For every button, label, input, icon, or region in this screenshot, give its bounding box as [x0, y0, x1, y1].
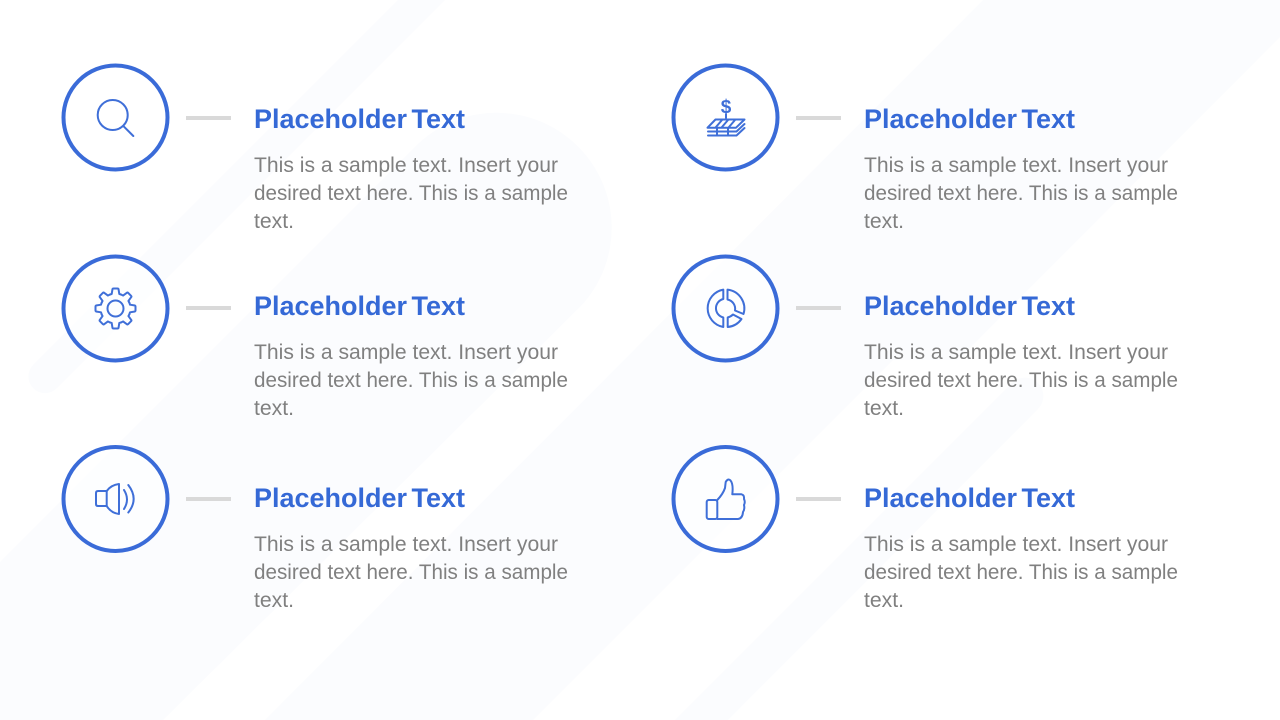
connector line [796, 497, 841, 501]
icon: speaker [96, 484, 134, 514]
body text: text. [864, 397, 904, 420]
icon circle: thumbs up [674, 447, 778, 551]
item: speaker [64, 447, 568, 612]
body text [254, 154, 568, 233]
body text: This is a sample text. Insert your [254, 154, 558, 177]
connector line [796, 306, 841, 310]
body text: text. [864, 589, 904, 612]
item: donut chart [674, 256, 1178, 420]
body text: This is a sample text. Insert your [864, 533, 1168, 556]
body text: text. [254, 397, 294, 420]
connector line [186, 497, 231, 501]
body text: text. [254, 210, 294, 233]
icon circle: search [64, 66, 168, 170]
body text: This is a sample text. Insert your [864, 154, 1168, 177]
body text [254, 533, 568, 612]
body text [864, 341, 1178, 420]
item: settings [64, 256, 568, 420]
heading: Placeholder Text [864, 291, 1075, 321]
heading: Placeholder Text [254, 483, 465, 513]
body text: text. [864, 210, 904, 233]
body text: text. [254, 589, 294, 612]
connector line [186, 116, 231, 120]
body text: This is a sample text. Insert your [864, 341, 1168, 364]
heading: Placeholder Text [864, 104, 1075, 134]
body text [864, 154, 1178, 233]
icon circle: donut chart [674, 256, 778, 360]
icon: dollar and cash stack [708, 97, 744, 136]
connector line [186, 306, 231, 310]
body text: This is a sample text. Insert your [254, 341, 558, 364]
icon circle: speaker [64, 447, 168, 551]
heading: Placeholder Text [864, 483, 1075, 513]
icon: donut chart [708, 290, 744, 327]
item: thumbs up [674, 447, 1178, 612]
body text: desired text here. This is a sample [254, 182, 568, 205]
icon: gear [96, 288, 136, 328]
item: money [674, 66, 1178, 233]
icon: dollar and cash stack: $ [721, 97, 732, 118]
body text: desired text here. This is a sample [864, 561, 1178, 584]
body text: desired text here. This is a sample [254, 369, 568, 392]
icon circle: money [674, 66, 778, 170]
body text: desired text here. This is a sample [864, 182, 1178, 205]
heading: Placeholder Text [254, 291, 465, 321]
icon circle: settings [64, 256, 168, 360]
body text: This is a sample text. Insert your [254, 533, 558, 556]
connector line [796, 116, 841, 120]
body text: desired text here. This is a sample [864, 369, 1178, 392]
item: search [64, 66, 568, 233]
body text [864, 533, 1178, 612]
icon: magnifying glass [98, 100, 133, 136]
body text: desired text here. This is a sample [254, 561, 568, 584]
body text [254, 341, 568, 420]
heading: Placeholder Text [254, 104, 465, 134]
icon: thumbs up [707, 480, 745, 519]
